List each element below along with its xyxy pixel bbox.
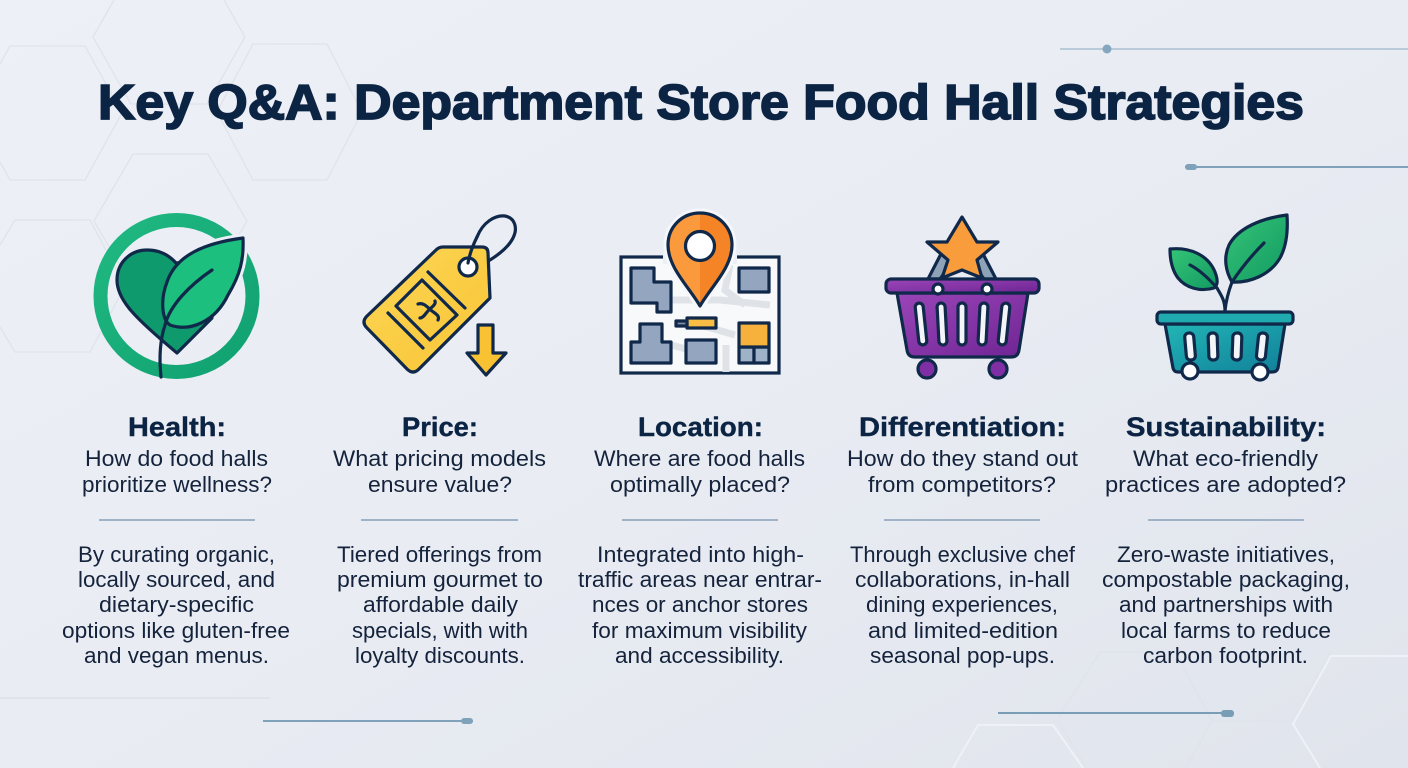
question: location: optimally placed? [610, 472, 790, 497]
answer: health: options like gluten-free [62, 618, 290, 643]
heading: price: Price: [402, 412, 478, 442]
answer: location: Integrated into high- [597, 542, 804, 567]
question: sustainability [1105, 446, 1346, 497]
answer: differentiation: collaborations, in-hall [855, 567, 1070, 592]
icon: price tag with down arrow [364, 216, 515, 375]
answer: health: By curating organic, [78, 542, 275, 567]
answer: location [578, 542, 822, 668]
answer: sustainability: compostable packaging, [1102, 567, 1350, 592]
heading: health: Health: [128, 412, 226, 442]
answer: location: nces or anchor stores [592, 592, 808, 617]
answer: price: loyalty discounts. [355, 643, 525, 668]
answer: price: specials, with with [352, 618, 528, 643]
answer: differentiation: Through exclusive chef [850, 542, 1076, 567]
answer: location: for maximum visibility [592, 618, 807, 643]
question: price: ensure value? [368, 472, 512, 497]
column: health [62, 220, 290, 668]
question: price: What pricing models [333, 446, 546, 471]
answer: price: premium gourmet to [337, 567, 543, 592]
answer: health: locally sourced, and [78, 567, 275, 592]
question: sustainability: What eco-friendly [1133, 446, 1319, 471]
icon: map with location pin [621, 213, 779, 373]
column: sustainability [1102, 215, 1350, 668]
heading: location: Location: [638, 412, 763, 442]
icon: heart and leaf in ring [100, 220, 252, 377]
question: differentiation [847, 446, 1079, 497]
answer: health: and vegan menus. [84, 643, 269, 668]
question: health: prioritize wellness? [82, 472, 272, 497]
question: price [333, 446, 546, 497]
heading: sustainability: Sustainability: [1126, 412, 1326, 442]
question: sustainability: practices are adopted? [1105, 472, 1346, 497]
column: price [333, 216, 546, 668]
question: health [82, 446, 272, 497]
title: Key Q&A: Department Store Food Hall Strategies [98, 76, 1304, 130]
question: health: How do food halls [85, 446, 268, 471]
question: location [594, 446, 805, 497]
answer: price [337, 542, 543, 668]
question: location: Where are food halls [594, 446, 805, 471]
question: differentiation: from competitors? [868, 472, 1056, 497]
answer: sustainability: carbon footprint. [1143, 643, 1308, 668]
column: location [578, 213, 822, 668]
answer: health: dietary-specific [99, 592, 254, 617]
column: differentiation [847, 217, 1079, 668]
icon: purple basket with star [886, 217, 1039, 378]
answer: sustainability: and partnerships with [1119, 592, 1333, 617]
answer: differentiation: and limited-edition [868, 618, 1058, 643]
answer: sustainability [1102, 542, 1350, 668]
icon: teal basket with sprout [1157, 215, 1293, 380]
heading: differentiation: Differentiation: [859, 412, 1066, 442]
answer: location: and accessibility. [615, 643, 784, 668]
answer: location: traffic areas near entrar- [578, 567, 822, 592]
answer: differentiation: dining experiences, [866, 592, 1058, 617]
answer: sustainability: Zero-waste initiatives, [1117, 542, 1335, 567]
question: differentiation: How do they stand out [847, 446, 1079, 471]
answer: sustainability: local farms to reduce [1121, 618, 1331, 643]
answer: health [62, 542, 290, 668]
answer: price: affordable daily [363, 592, 518, 617]
answer: differentiation [850, 542, 1076, 668]
answer: price: Tiered offerings from [337, 542, 542, 567]
answer: differentiation: seasonal pop-ups. [870, 643, 1055, 668]
